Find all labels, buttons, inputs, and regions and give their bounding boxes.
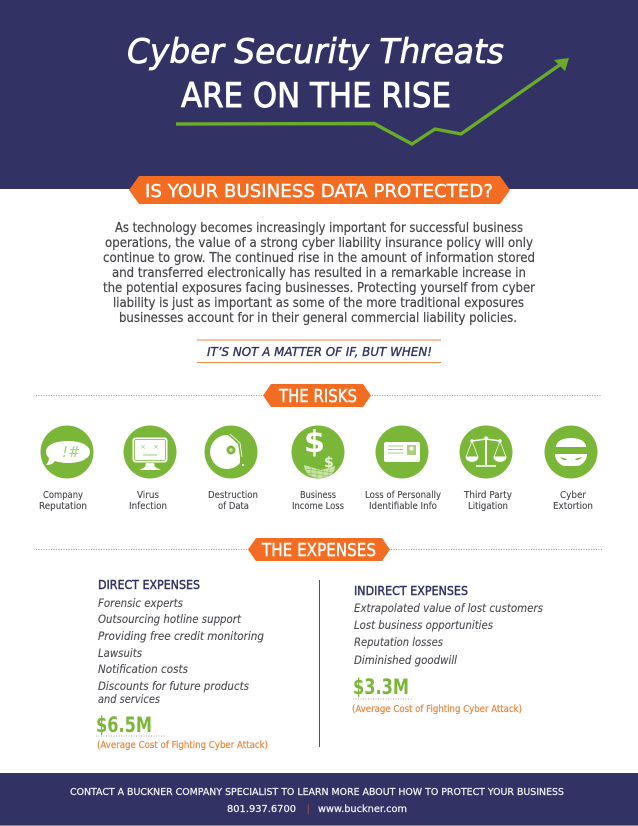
risk: business income loss: $ xyxy=(304,425,325,460)
risk: destruction of data xyxy=(204,426,258,512)
intro paragraph: and transferred electronically has resulted in a remarkable increase in xyxy=(112,266,526,281)
panel: indirect expenses: Lost business opportunities xyxy=(354,618,493,632)
risk: virus infection xyxy=(124,426,176,512)
footer band: | xyxy=(306,804,310,815)
panel: indirect expenses: Diminished goodwill xyxy=(354,653,458,667)
risk: virus infection: Infection xyxy=(129,501,167,512)
intro paragraph: continue to grow. The continued rise in the amount of information stored xyxy=(103,251,535,266)
intro paragraph xyxy=(103,221,536,326)
panel: direct expenses xyxy=(96,577,268,751)
intro paragraph: the potential exposures facing businesses. Protecting yourself from cyber xyxy=(103,281,536,296)
risk: business income loss: $ xyxy=(324,455,334,471)
intro paragraph: businesses account for in their general commercial liability policies. xyxy=(119,311,517,326)
intro paragraph: As technology becomes increasingly important for successful business xyxy=(115,221,523,236)
risk: business income loss: Business xyxy=(300,490,336,501)
risk: destruction of data: of Data xyxy=(218,501,249,512)
panel: direct expenses: Discounts for future products xyxy=(98,679,249,693)
panel: direct expenses: Lawsuits xyxy=(98,646,142,660)
panel: indirect expenses: (Average Cost of Fighting Cyber Attack) xyxy=(352,704,522,715)
risk: company reputation xyxy=(39,426,94,512)
banner: the expenses: THE EXPENSES xyxy=(261,540,376,561)
risk: loss of personally identifiable info: Loss of Personally xyxy=(365,490,441,501)
title: Cyber Security Threats xyxy=(127,32,504,72)
risk: company reputation: !# xyxy=(62,443,81,461)
panel: direct expenses: DIRECT EXPENSES xyxy=(98,577,200,592)
banner: is your business data protected xyxy=(129,176,510,204)
risk: cyber extortion: Cyber xyxy=(560,490,586,501)
risk: destruction of data: Destruction xyxy=(208,490,258,501)
intro paragraph: liability is just as important as some of the more traditional exposures xyxy=(113,296,524,311)
banner: is your business data protected: IS YOUR BUSINESS DATA PROTECTED? xyxy=(145,181,493,202)
panel: direct expenses: Forensic experts xyxy=(98,596,183,610)
risk: company reputation: Company xyxy=(43,490,83,501)
risk: company reputation: Reputation xyxy=(39,501,87,512)
panel: direct expenses: Providing free credit monitoring xyxy=(98,629,264,643)
risk: loss of personally identifiable info: Identifiable Info xyxy=(369,501,437,512)
footer band: 801.937.6700 xyxy=(227,804,296,815)
panel: direct expenses: and services xyxy=(98,692,160,706)
callout: not a matter of if: IT’S NOT A MATTER OF IF, BUT WHEN! xyxy=(207,344,432,359)
footer band: CONTACT A BUCKNER COMPANY SPECIALIST TO LEARN MORE ABOUT HOW TO PROTECT YOUR BUSINESS xyxy=(70,787,564,798)
risk: business income loss xyxy=(292,425,344,512)
risk: cyber extortion: Extortion xyxy=(553,501,593,512)
footer band: www.buckner.com xyxy=(318,804,407,815)
panel: direct expenses: Outsourcing hotline support xyxy=(98,612,241,626)
risk: third party litigation xyxy=(460,426,512,512)
risk: business income loss: Income Loss xyxy=(292,501,344,512)
risk: virus infection: × xyxy=(140,443,146,451)
panel: indirect expenses xyxy=(352,583,543,715)
risk: third party litigation: Third Party xyxy=(463,490,512,501)
title: ARE ON THE RISE xyxy=(181,76,451,116)
banner: the risks: THE RISKS xyxy=(278,386,357,407)
risk: cyber extortion xyxy=(544,426,598,512)
risk: loss of personally identifiable info xyxy=(365,426,441,512)
panel: indirect expenses: Extrapolated value of lost customers xyxy=(354,601,543,615)
risk: third party litigation: Litigation xyxy=(468,501,508,512)
panel: indirect expenses: INDIRECT EXPENSES xyxy=(354,583,468,598)
panel: direct expenses: Notification costs xyxy=(98,662,188,676)
panel: direct expenses: (Average Cost of Fighting Cyber Attack) xyxy=(97,740,268,751)
risk: virus infection: × xyxy=(153,443,159,451)
risk: virus infection: Virus xyxy=(137,490,159,501)
header band xyxy=(0,0,638,189)
panel: direct expenses: $6.5M xyxy=(96,713,152,737)
panel: indirect expenses: $3.3M xyxy=(353,675,409,699)
intro paragraph: operations, the value of a strong cyber liability insurance policy will only xyxy=(105,236,533,251)
title xyxy=(127,32,504,116)
footer band xyxy=(0,773,638,826)
panel: indirect expenses: Reputation losses xyxy=(354,635,443,649)
rising green arrow xyxy=(176,58,569,144)
